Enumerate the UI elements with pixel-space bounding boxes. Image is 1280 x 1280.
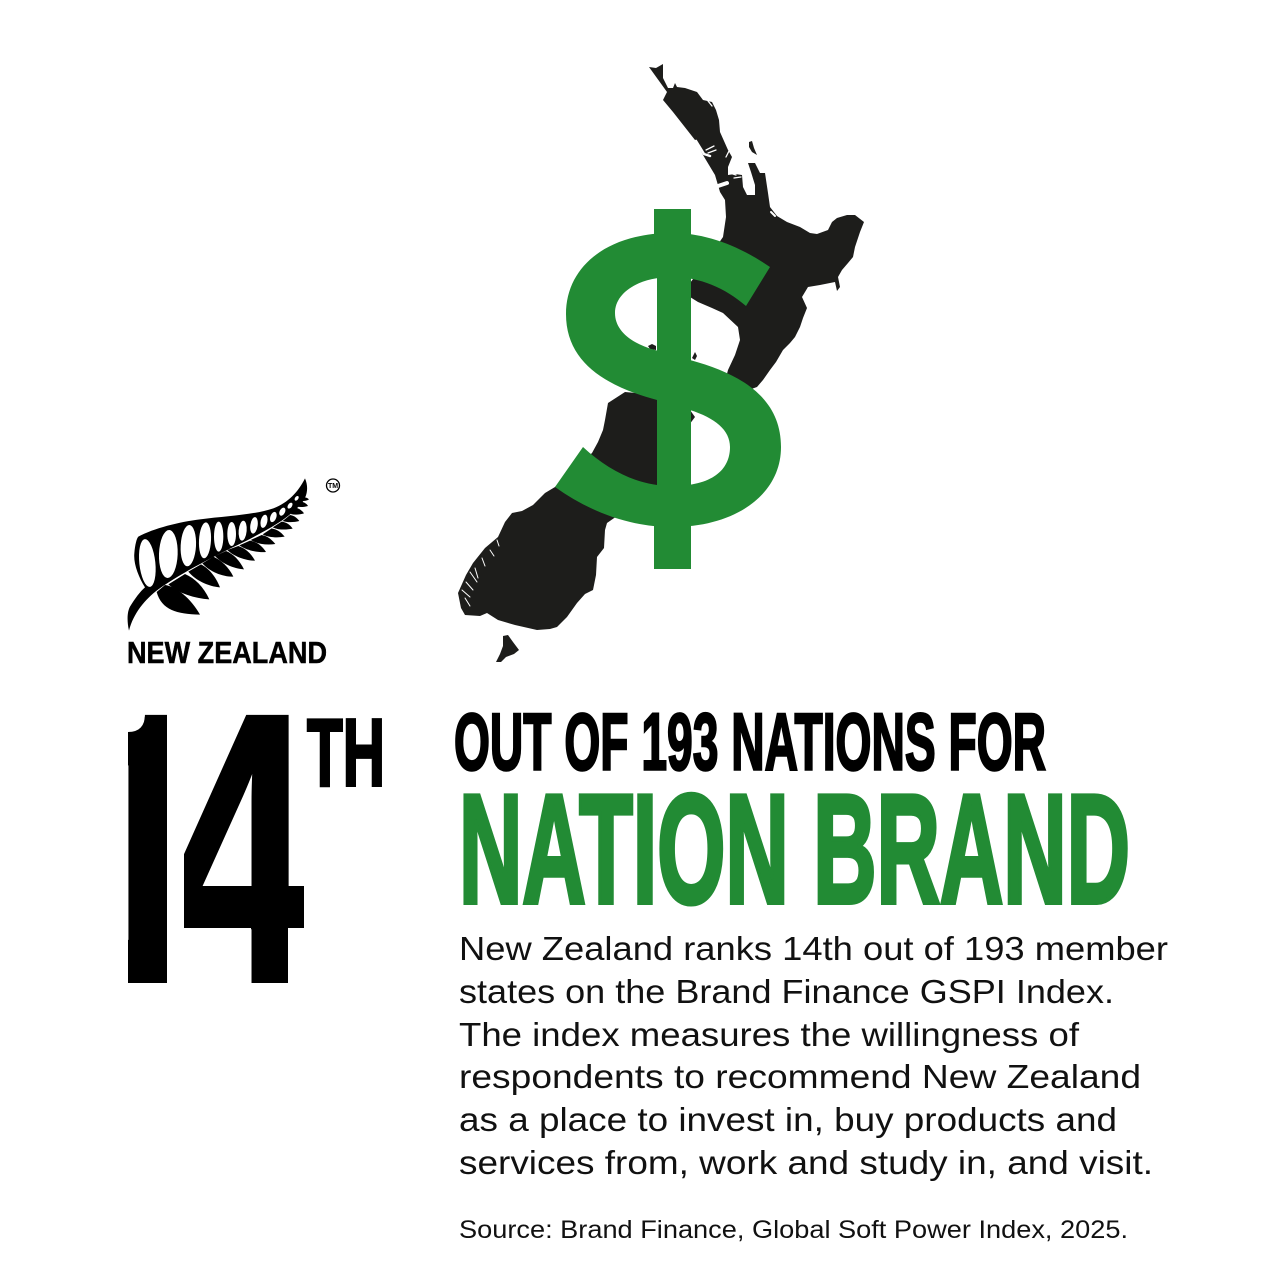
body text: states on the Brand Finance GSPI Index. — [459, 973, 1114, 1010]
small islands — [648, 344, 697, 360]
North Island — [649, 64, 864, 400]
fiords — [462, 540, 499, 606]
body text: The index measures the willingness of — [459, 1016, 1080, 1053]
body text: services from, work and study in, and visit. — [459, 1144, 1153, 1181]
body text — [459, 930, 1168, 1181]
body text: as a place to invest in, buy products and — [459, 1101, 1117, 1138]
icon: trademark — [326, 479, 340, 492]
map: New Zealand with dollar sign — [458, 64, 864, 662]
icon: trademark: TM — [328, 483, 338, 490]
rank number: 14 — [68, 633, 314, 1063]
rank suffix: TH — [307, 700, 385, 806]
South Island — [458, 392, 695, 630]
logo: silver fern with New Zealand wordmark — [127, 478, 340, 670]
icon: silver fern — [128, 478, 309, 631]
wordmark: NEW ZEALAND — [127, 635, 327, 670]
body text: New Zealand ranks 14th out of 193 member — [459, 930, 1168, 967]
Great Barrier Island — [749, 141, 757, 155]
dollar sign — [555, 209, 781, 569]
harbours — [696, 101, 775, 216]
Stewart Island — [496, 635, 519, 662]
body text: respondents to recommend New Zealand — [459, 1058, 1141, 1095]
source note: Source: Brand Finance, Global Soft Power Index, 2025. — [459, 1216, 1128, 1244]
rank: 14th — [128, 714, 382, 983]
